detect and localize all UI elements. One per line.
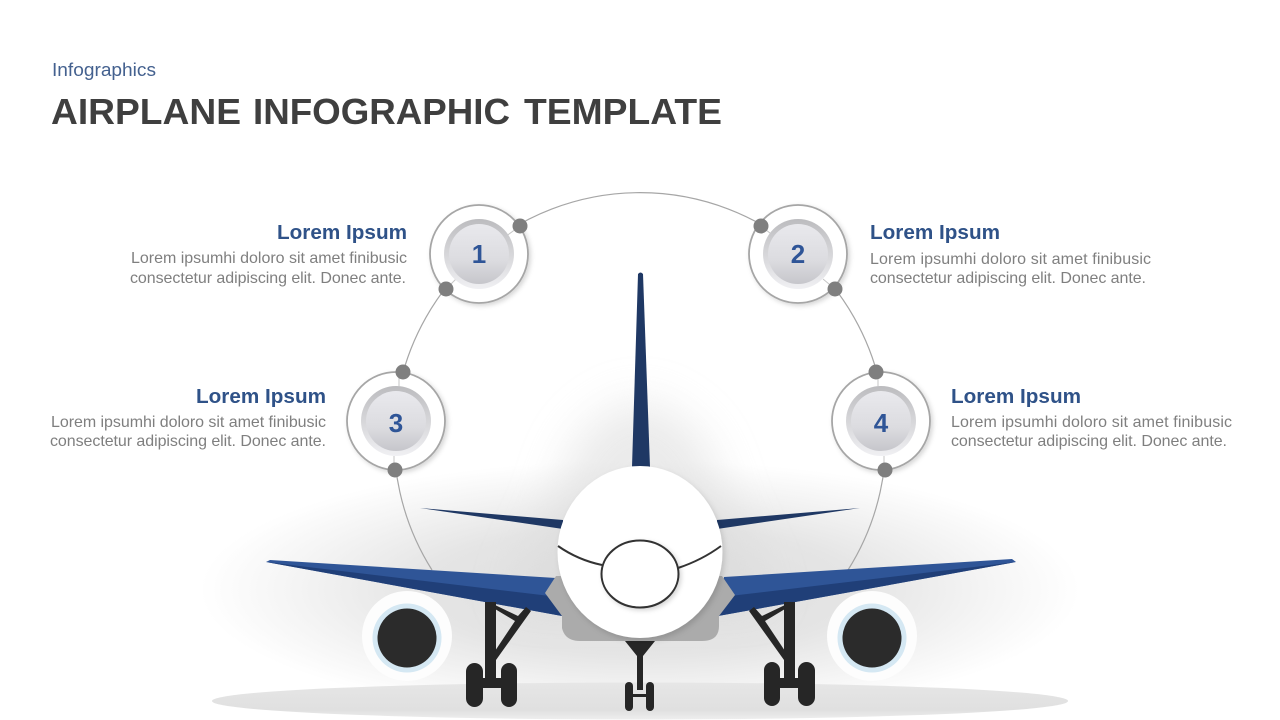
right landing gear (749, 602, 815, 706)
title: INFOGRAPHIC (253, 91, 510, 132)
tail fin (632, 272, 650, 467)
nose landing gear (625, 641, 655, 711)
text block 4: Lorem Ipsum (951, 386, 1081, 408)
left landing gear (466, 602, 531, 707)
windshield line left (558, 546, 602, 565)
windshield line right (678, 546, 721, 568)
node 2: 2 (791, 239, 805, 269)
left engine (362, 591, 452, 681)
right stabilizer (717, 508, 860, 529)
node 1 (430, 205, 528, 303)
left wing (266, 560, 562, 616)
node 4: 4 (874, 408, 889, 438)
text block 3 (50, 386, 326, 450)
text block 1 (130, 222, 407, 287)
node 4 (832, 364, 930, 478)
text block 3: Lorem ipsumhi doloro sit amet finibusic (51, 414, 326, 431)
text block 1: Lorem ipsumhi doloro sit amet finibusic (131, 250, 407, 267)
right engine (827, 591, 917, 681)
fuselage (558, 466, 722, 638)
title: AIRPLANE (51, 91, 241, 132)
title: TEMPLATE (524, 91, 722, 132)
text block 2: consectetur adipiscing elit. Donec ante. (870, 270, 1146, 287)
text block 4 (951, 386, 1232, 450)
node 3: 3 (389, 408, 403, 438)
cockpit window (602, 540, 678, 608)
node 1: 1 (472, 239, 486, 269)
text block 3: consectetur adipiscing elit. Donec ante. (50, 433, 326, 450)
grey wing root (545, 576, 735, 641)
text block 4: consectetur adipiscing elit. Donec ante. (951, 433, 1227, 450)
text block 3: Lorem Ipsum (196, 386, 326, 408)
background shadow behind airplane (200, 400, 1080, 720)
text block 2: Lorem ipsumhi doloro sit amet finibusic (870, 251, 1151, 268)
ground ellipse (212, 682, 1068, 720)
left stabilizer (420, 508, 563, 529)
connecting arc (394, 193, 886, 570)
text block 1: Lorem Ipsum (277, 222, 407, 244)
node 3 (347, 364, 445, 478)
airplane (266, 272, 1016, 711)
subtitle: Infographics (52, 60, 156, 80)
right wing (718, 559, 1016, 616)
text block 2: Lorem Ipsum (870, 222, 1000, 244)
node 2 (749, 205, 847, 303)
text block 2 (870, 222, 1151, 287)
text block 4: Lorem ipsumhi doloro sit amet finibusic (951, 414, 1232, 431)
title (51, 91, 722, 132)
text block 1: consectetur adipiscing elit. Donec ante. (130, 270, 406, 287)
